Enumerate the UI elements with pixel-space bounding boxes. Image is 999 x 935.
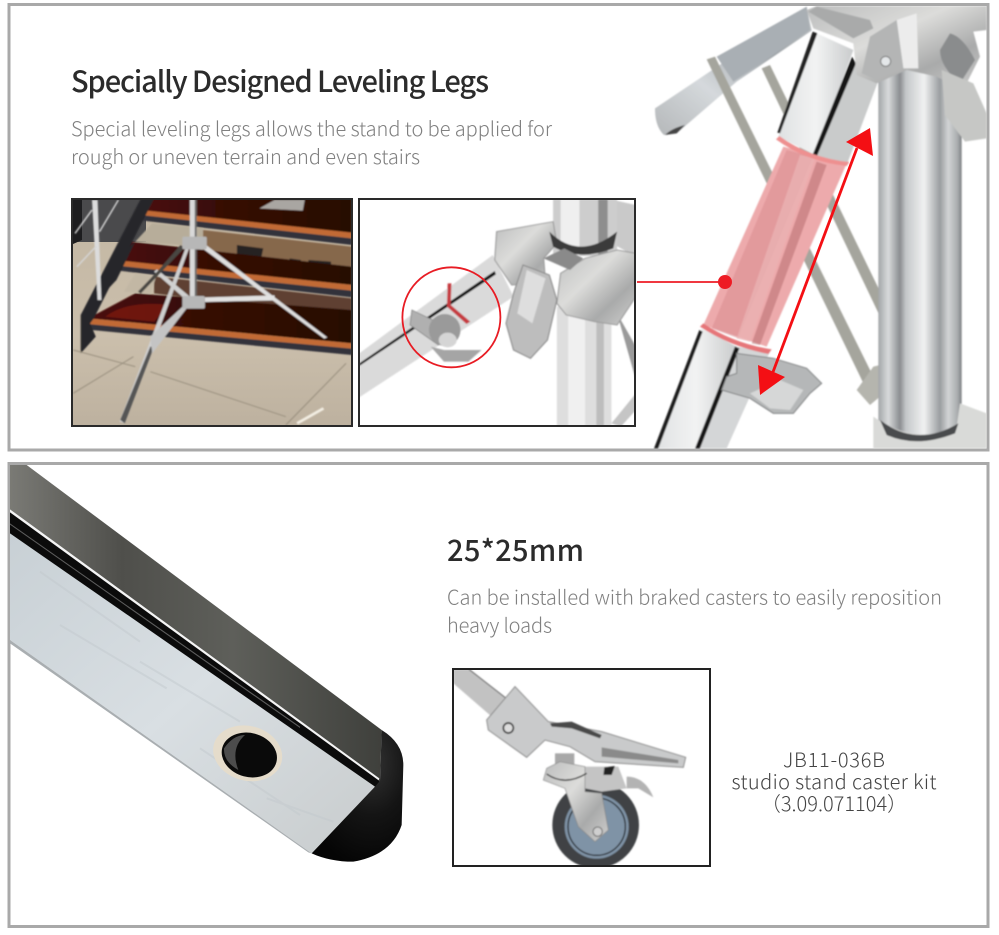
- wing knob: [722, 353, 822, 413]
- text block: caster description: Can be installed with braked casters to easily reposition: [447, 582, 942, 610]
- text block: description: [71, 113, 553, 170]
- panel: leveling legs: [9, 4, 988, 450]
- caption: caster kit: （3.09.071104）: [761, 788, 907, 817]
- photo: square tube close-up: [10, 465, 403, 862]
- photo: knob detail: [359, 199, 636, 427]
- text block: description: Special leveling legs allows the stand to be applied for: [71, 113, 553, 142]
- arrow: double-headed length indicator: [758, 128, 873, 395]
- text block: description: rough or uneven terrain and even stairs: [71, 141, 420, 170]
- photo: caster kit: [453, 669, 710, 868]
- knob inside highlight: [410, 310, 442, 345]
- caption: caster kit: studio stand caster kit: [732, 766, 936, 795]
- text block: caster description: heavy loads: [447, 610, 552, 638]
- panel: tube and caster: [9, 464, 988, 926]
- caption: caster kit: JB11-036B: [783, 744, 885, 773]
- heading: tube size: 25*25mm: [447, 528, 584, 570]
- translucent pink zone: [703, 147, 847, 347]
- photo: stand on stairs: [71, 198, 353, 427]
- text block: caster description: [447, 582, 942, 638]
- callout: red leader line and dot: [637, 275, 732, 289]
- heading: Specially Designed Leveling Legs: [71, 59, 489, 101]
- caption: caster kit: [732, 744, 936, 817]
- photo: leg close-up with measurement: [654, 6, 987, 448]
- end cap: [312, 730, 403, 862]
